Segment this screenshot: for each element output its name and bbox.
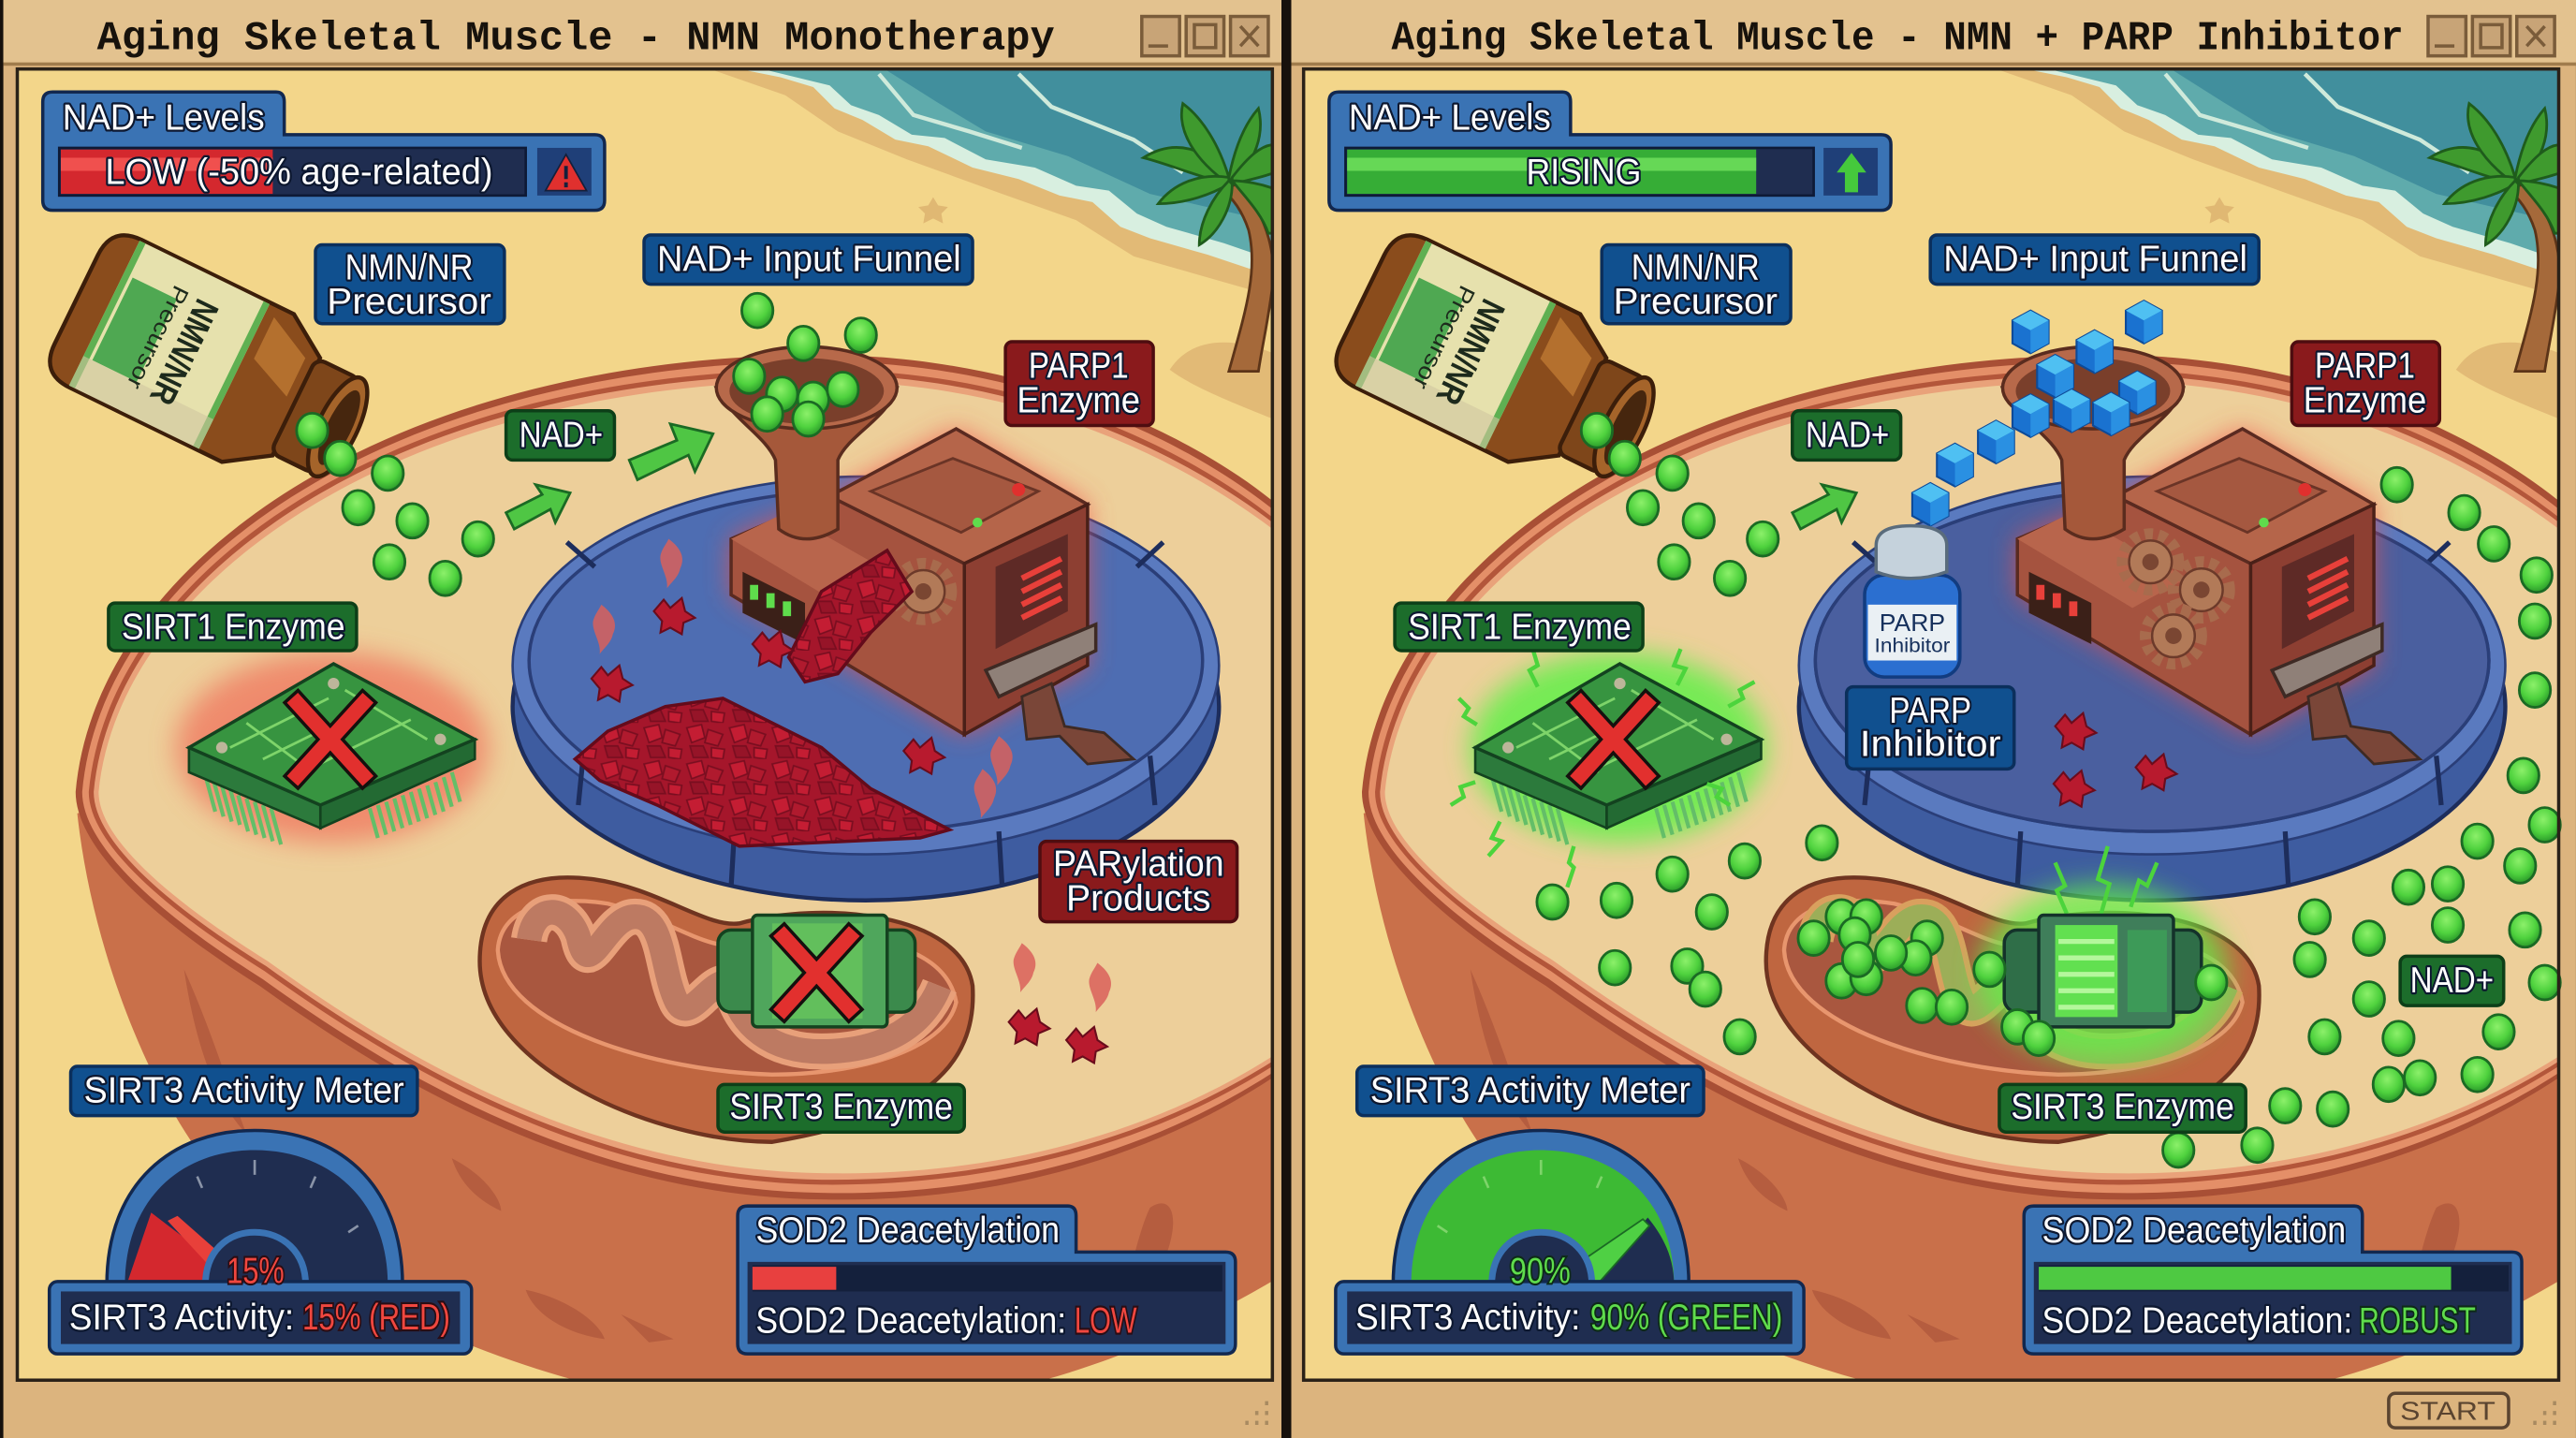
- PARP inhibitor bottle: Inhibitor: [1875, 636, 1950, 657]
- NAD+ molecules: [1537, 413, 2560, 1167]
- label: PARP inhibitor: Inhibitor: [1860, 724, 2001, 764]
- gauge: SIRT3 activity 90%: 90%: [1510, 1252, 1571, 1292]
- label: SIRT3 enzyme: SIRT3 Enzyme: [2011, 1087, 2234, 1127]
- label: PARylation products: PARylation: [1053, 844, 1224, 884]
- SIRT1 chip with red glow: [176, 653, 488, 844]
- bottle: [48, 233, 370, 479]
- label: PARP inhibitor: [1847, 687, 2014, 769]
- inner frame border: [17, 69, 1272, 1380]
- SOD2 deacetylation panel: [2024, 1206, 2522, 1354]
- panel: NMN + PARP inhibitor window: [1286, 0, 2576, 1438]
- resize grip: [1245, 1403, 1268, 1423]
- NAD+ molecules: [297, 293, 876, 595]
- label: NMN/NR precursor: Precursor: [327, 282, 491, 322]
- label: PARP1 enzyme: [2291, 342, 2439, 426]
- gauge: SIRT3 activity 15%: 15% (RED): [302, 1298, 450, 1338]
- bottle label text: Precursor: [122, 281, 193, 393]
- gauge: SIRT3 activity 15%: SIRT3 Activity:: [69, 1298, 294, 1338]
- SOD2 deacetylation panel: [738, 1206, 1236, 1354]
- left window chrome: [4, 0, 1281, 1438]
- title: Aging Skeletal Muscle - NMN + PARP Inhibitor: [1392, 16, 2404, 63]
- NAD+ levels bar: NAD+ Levels: [63, 98, 265, 139]
- label: SIRT1 enzyme: SIRT1 Enzyme: [1408, 608, 1632, 648]
- right window chrome: [1292, 0, 2576, 1438]
- NAD+ levels bar: [43, 92, 605, 211]
- NAD+ levels bar: [1329, 92, 1891, 211]
- bottle label text: NMN/NR: [1428, 293, 1513, 411]
- title: Aging Skeletal Muscle - NMN Monotherapy: [97, 16, 1055, 63]
- label: NAD+: NAD+: [520, 415, 603, 455]
- label: NAD+ input funnel: NAD+ Input Funnel: [657, 240, 961, 280]
- label: PARP inhibitor: PARP: [1889, 691, 1971, 731]
- label: SIRT3 activity meter: SIRT3 Activity Meter: [84, 1071, 404, 1111]
- gauge: SIRT3 activity 15%: [50, 1130, 472, 1354]
- SOD2 deacetylation panel: SOD2 Deacetylation:: [755, 1300, 1066, 1341]
- machine gear and LEDs: [754, 564, 951, 620]
- NAD+ levels bar: RISING: [1526, 153, 1641, 193]
- inner frame border: [1304, 69, 2559, 1380]
- label: SIRT1 enzyme: SIRT1 Enzyme: [122, 608, 345, 648]
- label: NAD+: NAD+: [1806, 415, 1889, 455]
- label: PARylation products: [1040, 842, 1237, 922]
- START button: [2389, 1393, 2509, 1428]
- gauge: SIRT3 activity 90%: 90% (GREEN): [1590, 1298, 1782, 1338]
- label: PARP1 enzyme: Enzyme: [2304, 381, 2426, 421]
- label: NAD+ right: NAD+: [2410, 961, 2494, 1001]
- gauge: SIRT3 activity 90%: SIRT3 Activity:: [1355, 1298, 1580, 1338]
- darker nucleus interior: [1815, 490, 2489, 831]
- NAD+ levels bar: NAD+ Levels: [1349, 98, 1551, 139]
- SOD2 deacetylation panel: ROBUST: [2359, 1300, 2476, 1341]
- resize grip: [2533, 1403, 2556, 1423]
- label: PARylation products: Products: [1066, 878, 1211, 918]
- window buttons: [2428, 17, 2554, 56]
- NAD+ arrow: [1793, 485, 1856, 529]
- PARP inhibitor bottle: PARP: [1880, 609, 1945, 637]
- cristae of mitochondrion: [529, 912, 940, 1051]
- fragments pouring from machine: [788, 550, 912, 682]
- gauge: SIRT3 activity 90%: [1336, 1130, 1804, 1354]
- SOD2 deacetylation panel: SOD2 Deacetylation:: [2042, 1300, 2352, 1341]
- SOD2 deacetylation panel: SOD2 Deacetylation: [2042, 1211, 2346, 1251]
- label: NMN/NR precursor: [315, 244, 505, 324]
- panel: NMN monotherapy window: [0, 0, 1290, 1438]
- label: PARP1 enzyme: PARP1: [1029, 346, 1129, 387]
- label: PARP1 enzyme: Enzyme: [1017, 381, 1140, 421]
- bottle: [1326, 226, 1677, 509]
- label: PARP1 enzyme: PARP1: [2315, 346, 2415, 387]
- PARP inhibitor cubes: [1912, 301, 2162, 526]
- gauge: SIRT3 activity 15%: 15%: [227, 1252, 285, 1292]
- NAD+ arrows: [506, 424, 713, 529]
- SIRT1 chip with green glow: [1451, 649, 1766, 888]
- label: NMN/NR precursor: NMN/NR: [1632, 247, 1760, 287]
- bottle label text: NMN/NR: [142, 293, 226, 411]
- SIRT3 motor active with green glow: [1978, 846, 2228, 1062]
- label: PARP1 enzyme: [1005, 342, 1153, 426]
- label: NMN/NR precursor: [1602, 244, 1791, 324]
- label: SIRT3 activity meter: SIRT3 Activity Meter: [1370, 1071, 1690, 1111]
- SOD2 deacetylation panel: SOD2 Deacetylation: [755, 1211, 1060, 1251]
- scattered fragments: [592, 539, 1111, 1064]
- residual fragments: [2054, 713, 2176, 807]
- bottle label text: [1407, 281, 1513, 411]
- SOD2 deacetylation panel: LOW: [1075, 1300, 1137, 1341]
- label: NAD+ input funnel: NAD+ Input Funnel: [1943, 240, 2247, 280]
- label: NMN/NR precursor: Precursor: [1613, 282, 1778, 322]
- red fragment pile: [575, 698, 949, 846]
- machine gears and LEDs: [2041, 534, 2230, 664]
- SIRT3 motor blocked: [718, 916, 915, 1027]
- label: NMN/NR precursor: NMN/NR: [345, 247, 474, 287]
- window buttons: [1142, 17, 1268, 56]
- START button: START: [2400, 1396, 2496, 1425]
- scene frame: [1286, 66, 2576, 1397]
- PARP inhibitor bottle: [1865, 526, 1960, 677]
- bottle label text: Precursor: [1408, 281, 1479, 393]
- label: SIRT3 enzyme: SIRT3 Enzyme: [729, 1087, 953, 1127]
- scene frame: [0, 66, 1290, 1397]
- bottle label text: [128, 286, 219, 404]
- NAD+ levels bar: LOW (-50% age-related): [105, 153, 493, 193]
- glowing cristae of mitochondrion: [1815, 912, 2226, 1051]
